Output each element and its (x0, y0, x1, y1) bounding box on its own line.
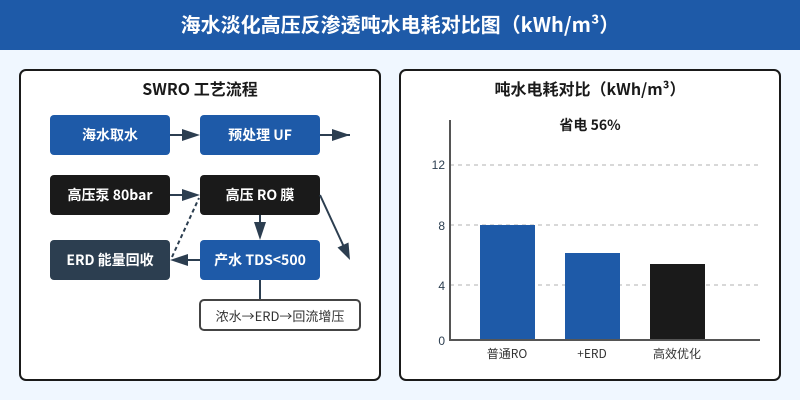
axes (450, 120, 760, 340)
note: brine recovery: 浓水→ERD→回流增压 (216, 306, 344, 325)
arrow: membrane diagonal outlet (320, 195, 350, 260)
arrow: dashed ERD return (172, 198, 199, 257)
callout: 56% saving: 省电 56% (559, 115, 621, 135)
connector: product water to note (259, 280, 261, 300)
step: RO membrane (200, 175, 320, 215)
x-axis labels: 高效优化 (653, 345, 701, 362)
step: ERD energy recovery: ERD 能量回收 (66, 250, 154, 270)
panel: energy consumption chart (400, 70, 780, 380)
arrow: product water to ERD (170, 254, 200, 266)
title banner: 海水淡化高压反渗透吨水电耗对比图（kWh/m³） (181, 9, 619, 38)
step: product water (200, 240, 320, 280)
step: UF pretreatment: 预处理 UF (228, 125, 292, 145)
step: ERD energy recovery (50, 240, 170, 280)
step: UF pretreatment (200, 115, 320, 155)
x-axis labels: 普通RO (487, 345, 527, 362)
arrow: pump to membrane (170, 189, 200, 201)
panel: SWRO process flow (20, 70, 380, 380)
step: seawater intake (50, 115, 170, 155)
arrow: intake to pretreatment (170, 129, 200, 141)
panel heading: energy comparison: 吨水电耗对比（kWh/m³） (495, 76, 685, 100)
step: high pressure pump (50, 175, 170, 215)
step: high pressure pump: 高压泵 80bar (68, 185, 153, 205)
step: RO membrane: 高压 RO 膜 (226, 185, 294, 205)
arrow: pretreatment onward (320, 129, 350, 141)
bar: +ERD (565, 253, 620, 340)
title banner (0, 0, 800, 50)
note: brine recovery (200, 300, 360, 330)
x-axis labels: +ERD (577, 345, 607, 362)
step: product water: 产水 TDS<500 (214, 250, 306, 270)
panel heading: SWRO process: SWRO 工艺流程 (142, 76, 258, 100)
arrow: membrane to product water (254, 215, 266, 240)
y-axis labels: 12 (432, 158, 445, 172)
y-axis labels: 4 (438, 279, 445, 293)
y-axis labels (432, 158, 445, 348)
x-axis labels (487, 345, 701, 362)
step: seawater intake: 海水取水 (82, 125, 138, 145)
bar: standard RO (480, 225, 535, 340)
y-axis labels: 0 (438, 334, 445, 348)
bar: optimized (650, 264, 705, 340)
y-axis labels: 8 (438, 219, 445, 233)
bar chart (432, 120, 760, 362)
